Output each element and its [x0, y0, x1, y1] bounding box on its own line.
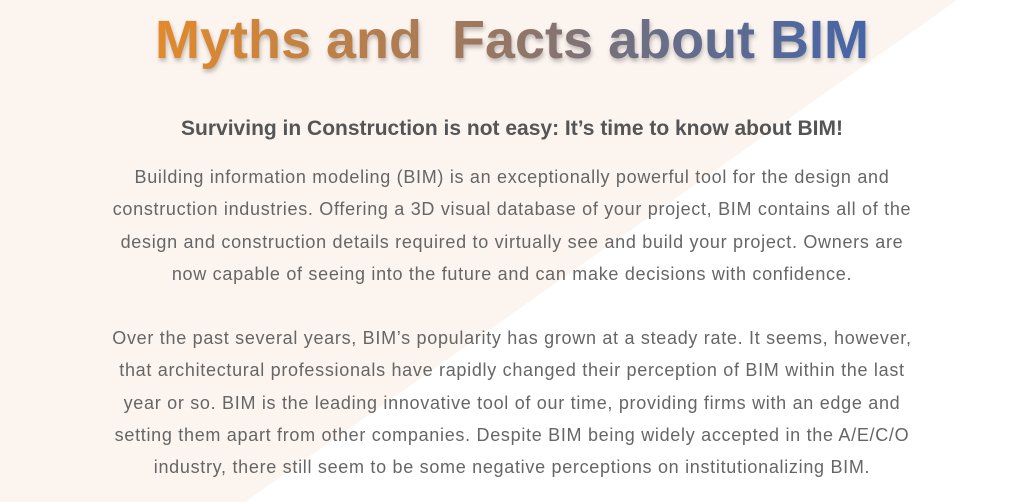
paragraph 2: [112, 328, 912, 477]
paragraph 2: Over the past several years, BIM’s popularity has grown at a steady rate. It seems, however,: [112, 328, 912, 348]
paragraph 2: setting them apart from other companies. Despite BIM being widely accepted in the A/E/C/O: [115, 425, 909, 445]
paragraph 2: that architectural professionals have rapidly changed their perception of BIM within the last: [119, 360, 905, 380]
paragraph 1: Building information modeling (BIM) is an exceptionally powerful tool for the design and: [134, 167, 889, 187]
paragraph 1: construction industries. Offering a 3D visual database of your project, BIM contains all of the: [113, 199, 911, 219]
paragraph 2: industry, there still seem to be some negative perceptions on institutionalizing BIM.: [154, 457, 870, 477]
paragraph 1: now capable of seeing into the future and can make decisions with confidence.: [172, 264, 852, 284]
paragraph 2: year or so. BIM is the leading innovative tool of our time, providing firms with an edge and: [124, 393, 900, 413]
paragraph 1: design and construction details required to virtually see and build your project. Owners are: [121, 232, 903, 252]
subtitle: Surviving in Construction is not easy: It’s time to know about BIM!: [181, 117, 843, 140]
paragraph 1: [113, 167, 911, 284]
title: Myths and Facts about BIM: [155, 10, 869, 70]
